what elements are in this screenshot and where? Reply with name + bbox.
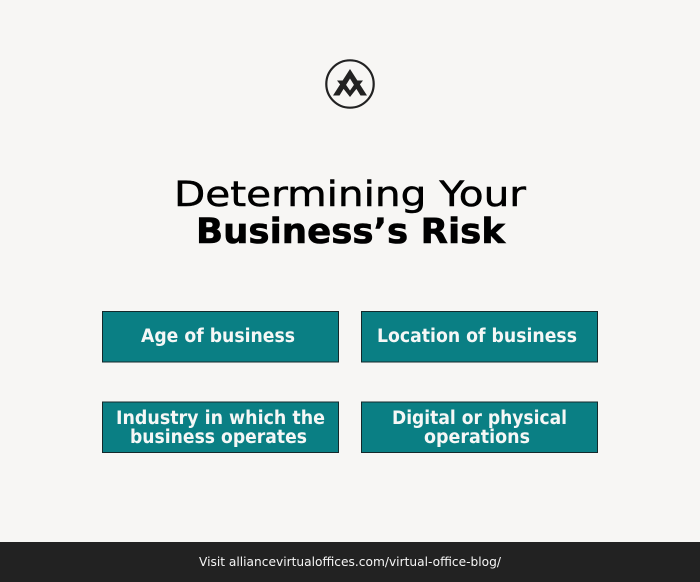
panel: digital or physical	[362, 402, 598, 452]
panel: age of business	[102, 312, 338, 362]
panel: digital or physical: operations	[424, 427, 530, 448]
title	[174, 175, 527, 252]
panel: location of business	[362, 312, 598, 362]
panel: location of business: Location of business	[377, 326, 577, 347]
footer: Visit alliancevirtualoffices.com/virtual-office-blog/	[199, 554, 502, 569]
title: Determining Your	[174, 175, 527, 215]
panel: industry: Industry in which the	[116, 408, 325, 429]
icon: logo	[326, 60, 374, 108]
title: Business’s Risk	[196, 212, 506, 252]
panel: age of business: Age of business	[141, 326, 295, 347]
panel: digital or physical: Digital or physical	[392, 408, 567, 429]
footer	[0, 542, 700, 582]
panel: industry: business operates	[130, 427, 307, 448]
panel: industry	[102, 402, 338, 452]
